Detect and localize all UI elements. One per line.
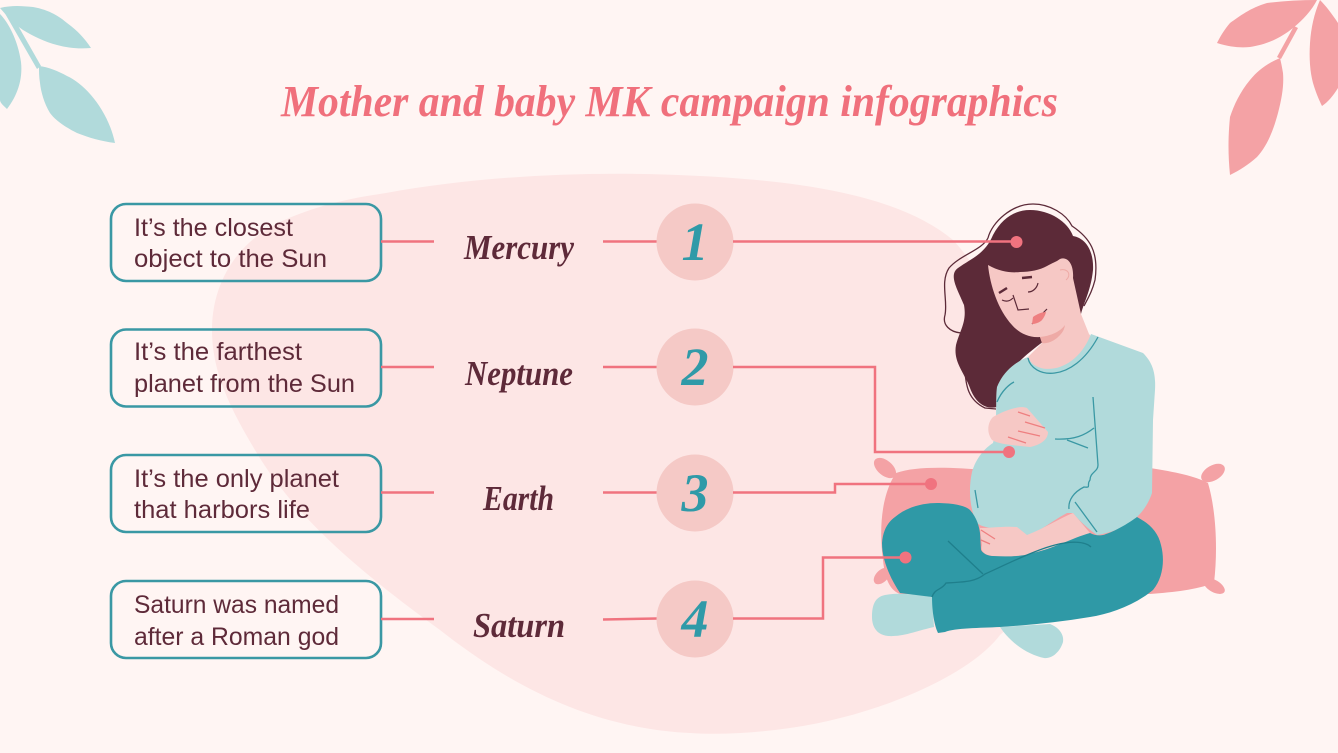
facial details xyxy=(999,277,1047,324)
number 3: 3 xyxy=(680,463,708,523)
decorative leaves: top right xyxy=(1217,0,1338,175)
number 4: 4 xyxy=(680,589,708,649)
row 3: Earth xyxy=(111,454,734,532)
number 1 xyxy=(656,204,734,280)
connector 1 xyxy=(733,236,1022,248)
connector 3 xyxy=(733,478,937,492)
title: Mother and baby MK campaign infographics xyxy=(280,77,1058,126)
text box 1 xyxy=(111,204,381,281)
label: Mercury: Mercury xyxy=(463,228,574,267)
lower hand xyxy=(980,513,1090,557)
label: Neptune: Neptune xyxy=(464,354,573,393)
text box 3: that harbors life xyxy=(134,496,310,524)
row 1: Mercury xyxy=(111,204,734,281)
lips xyxy=(1032,312,1046,324)
chin shadow xyxy=(1040,325,1065,343)
illustration: pregnant woman on a pillow xyxy=(870,204,1228,658)
number 2: 2 xyxy=(680,337,708,397)
hair outline xyxy=(944,204,1096,409)
text box 1: It’s the closest xyxy=(134,214,293,242)
hair xyxy=(954,210,1093,408)
decorative leaves: top left xyxy=(0,6,115,143)
text box 4 xyxy=(111,581,381,658)
number 4 xyxy=(656,580,734,658)
finger lines xyxy=(981,412,1045,544)
number 3 xyxy=(656,454,734,532)
upper hand xyxy=(988,407,1048,447)
number 1: 1 xyxy=(682,212,708,272)
label: Saturn: Saturn xyxy=(473,606,565,645)
neck and face xyxy=(988,258,1094,373)
sweater and belly xyxy=(970,334,1155,535)
number 2 xyxy=(656,328,734,406)
pillow xyxy=(870,454,1228,597)
background blob xyxy=(212,174,1046,734)
ear line xyxy=(1060,270,1069,280)
feet xyxy=(872,594,1063,658)
text box 3: It’s the only planet xyxy=(134,465,339,493)
sweater details xyxy=(975,337,1098,532)
row 4: Saturn xyxy=(111,580,734,658)
text box 2: It’s the farthest xyxy=(134,338,302,366)
text box 1: object to the Sun xyxy=(134,245,327,273)
connector 4 xyxy=(733,552,912,618)
trousers xyxy=(882,503,1163,633)
text box 2 xyxy=(111,330,381,406)
text box 4: after a Roman god xyxy=(134,623,339,651)
text box 3 xyxy=(111,455,381,532)
connector 2 xyxy=(733,367,1015,458)
trouser details xyxy=(932,541,1091,597)
label: Earth: Earth xyxy=(482,479,554,518)
text box 2: planet from the Sun xyxy=(134,370,355,398)
row 2: Neptune xyxy=(111,328,734,406)
text box 4: Saturn was named xyxy=(134,591,339,619)
